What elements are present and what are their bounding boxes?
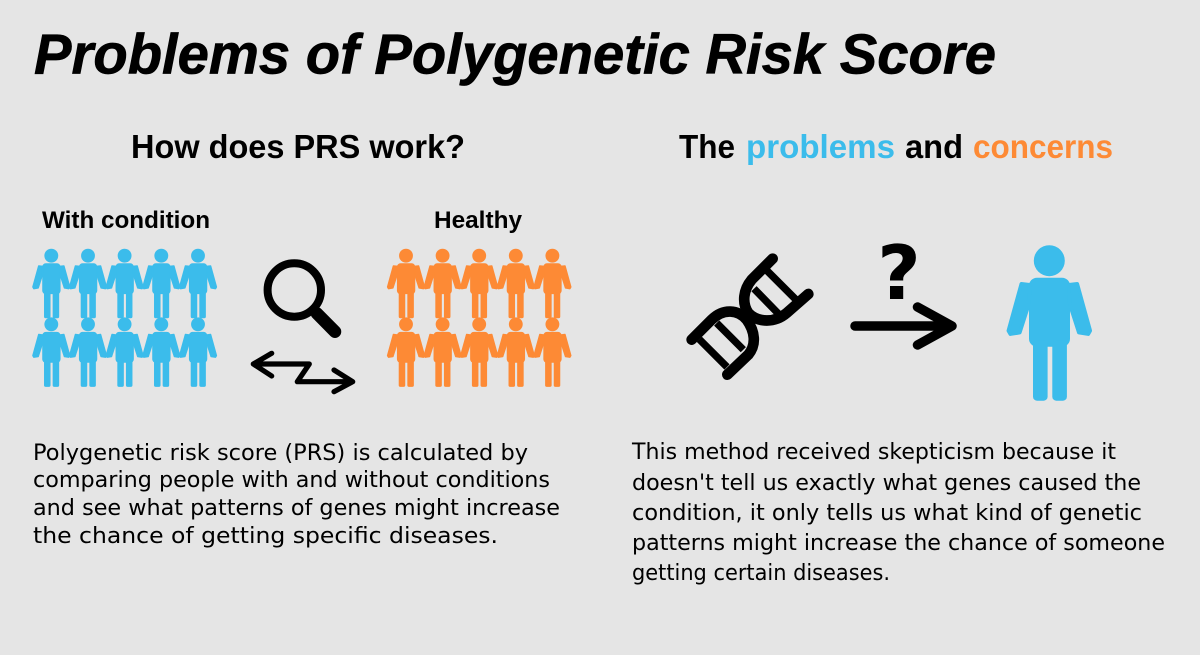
- icon: magnifying glass: [268, 263, 335, 332]
- icon: arrow: [855, 307, 952, 345]
- text: skepticism explanation: This method received skepticism because it: [631, 439, 1116, 465]
- text: PRS explanation: [33, 440, 560, 549]
- text: skepticism explanation: [631, 439, 1165, 586]
- heading: the problems and concerns: problems: [746, 128, 895, 165]
- heading: how does PRS work: How does PRS work?: [131, 128, 465, 165]
- title: Problems of Polygenetic Risk Score: [34, 22, 996, 86]
- icon: zigzag double arrow: [253, 353, 353, 392]
- icon: blue person: [1008, 245, 1090, 401]
- text: skepticism explanation: patterns might increase the chance of someone: [632, 530, 1165, 556]
- heading: the problems and concerns: concerns: [973, 128, 1113, 165]
- panel: how PRS works: [33, 128, 571, 549]
- icon: question mark: ?: [877, 229, 921, 317]
- text: skepticism explanation: getting certain diseases.: [632, 560, 890, 586]
- text: skepticism explanation: doesn't tell us exactly what genes caused the: [632, 470, 1141, 496]
- label: healthy: Healthy: [434, 207, 523, 234]
- text: PRS explanation: comparing people with and without conditions: [33, 467, 550, 493]
- icon group: blue people with condition: [33, 249, 216, 387]
- text: PRS explanation: the chance of getting specific diseases.: [33, 523, 498, 549]
- label: with condition: With condition: [42, 207, 210, 234]
- panel: problems and concerns: [631, 128, 1165, 586]
- text: PRS explanation: and see what patterns of genes might increase: [33, 495, 560, 521]
- icon group: orange healthy people: [388, 249, 571, 387]
- heading: the problems and concerns: and: [905, 128, 963, 165]
- icon: DNA helix: [692, 259, 808, 375]
- text: skepticism explanation: condition, it only tells us what kind of genetic: [632, 500, 1142, 526]
- text: PRS explanation: Polygenetic risk score (PRS) is calculated by: [33, 440, 528, 466]
- heading: the problems and concerns: The: [679, 128, 735, 165]
- heading: the problems and concerns: [679, 128, 1113, 165]
